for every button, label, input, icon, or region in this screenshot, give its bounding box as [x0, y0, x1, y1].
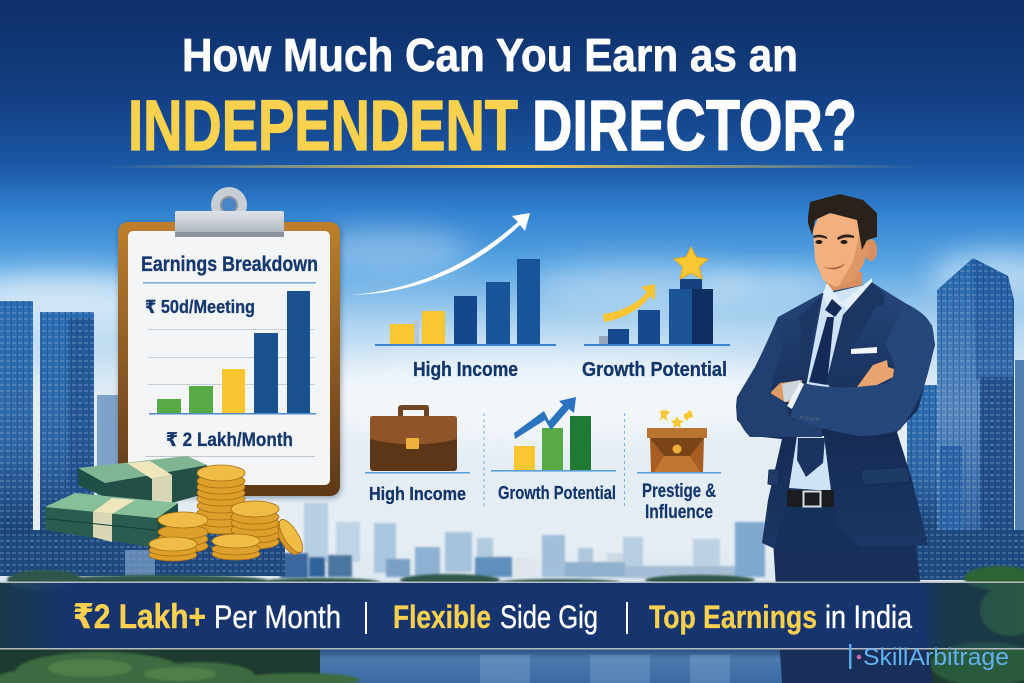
- jacket: [736, 283, 935, 549]
- hair: [808, 194, 877, 250]
- coin: leaning: [271, 518, 303, 558]
- chart: growth bars with blue arrow: [491, 397, 616, 472]
- head: [808, 194, 877, 287]
- right towers: [907, 258, 1024, 580]
- figure: businessman with crossed arms: [736, 194, 935, 683]
- trousers: [773, 540, 933, 683]
- icon: prestige chest with stars: [637, 410, 721, 474]
- title: How Much Can You Earn as an: [182, 29, 798, 81]
- banner: key facts: Side Gig: [500, 599, 598, 635]
- title: [128, 29, 857, 166]
- under arm sleeve: [736, 317, 822, 437]
- coin stack: front left: [149, 537, 197, 561]
- lower shirt: [789, 436, 831, 491]
- cash stack: lower: [45, 493, 178, 548]
- shirt cuff: [787, 382, 804, 409]
- clipboard heading: Earnings Breakdown: [141, 253, 318, 276]
- gold divider: [100, 165, 924, 168]
- label: high income small: High Income: [369, 484, 466, 504]
- label: per meeting: ₹ 50d/Meeting: [145, 297, 255, 317]
- icon: gold star: [674, 247, 708, 279]
- watch: [782, 380, 802, 402]
- mouth: [822, 263, 846, 269]
- icon: cash stacks: [45, 456, 207, 548]
- trees and water: [0, 566, 1024, 683]
- sleeve buttons: [800, 415, 819, 421]
- coin stack: tall: [197, 465, 245, 534]
- left towers: [0, 301, 118, 536]
- divider lines: [484, 413, 624, 507]
- banner: key facts: ₹2 Lakh+: [73, 598, 206, 636]
- pocket square: [851, 347, 877, 354]
- label: prestige and influence: Prestige &: [642, 481, 716, 502]
- lower tie: [797, 438, 825, 477]
- coin stack: right: [231, 501, 279, 549]
- coin stack: front centre: [212, 534, 260, 560]
- jacket pocket flaps: [768, 467, 910, 486]
- upper arm sleeve: [790, 303, 934, 436]
- chart: high income: [375, 259, 556, 346]
- panel: earnings clipboard: [118, 187, 340, 496]
- banner: key facts: Top Earnings: [649, 599, 817, 635]
- belt: [787, 490, 834, 507]
- label: growth potential small: Growth Potential: [498, 483, 616, 503]
- skyline: dark lower left buildings: [0, 530, 285, 576]
- logo: SkillArbitrage: SkillArbitrage: [863, 644, 1009, 671]
- banner: key facts: Per Month: [214, 599, 341, 635]
- hand: left under arm: [770, 380, 802, 402]
- coin stack: left: [158, 512, 208, 553]
- tie: [809, 299, 842, 385]
- arrow: rising income: [350, 213, 530, 295]
- icon: metal clip: [175, 187, 284, 237]
- lapels: [798, 282, 885, 387]
- shirt and collar: [806, 278, 872, 387]
- label: per month: ₹ 2 Lakh/Month: [166, 430, 293, 451]
- arrow: yellow growth: [603, 284, 655, 322]
- label: prestige and influence: Influence: [645, 502, 713, 523]
- hand: right on arm: [857, 360, 894, 387]
- banner: key facts: [0, 582, 1024, 650]
- label: prestige and influence: [642, 481, 716, 523]
- banner: key facts: Flexible: [393, 599, 491, 635]
- icon: briefcase: [365, 405, 470, 474]
- eyes: [816, 240, 848, 244]
- eyebrows: [813, 234, 854, 240]
- label: high income: High Income: [413, 359, 518, 381]
- bar chart: earnings: [148, 291, 316, 414]
- icon: gold coins: [149, 465, 307, 561]
- title: INDEPENDENT: [128, 87, 518, 166]
- trousers opening: [774, 505, 860, 548]
- label: growth potential: Growth Potential: [582, 359, 727, 381]
- chart: growth potential with star: [584, 247, 730, 346]
- skyline: distant buildings: [280, 503, 765, 578]
- neck: [826, 272, 862, 302]
- cash stack: upper: [78, 456, 207, 503]
- title: DIRECTOR?: [532, 87, 857, 166]
- banner: key facts: in India: [825, 599, 912, 635]
